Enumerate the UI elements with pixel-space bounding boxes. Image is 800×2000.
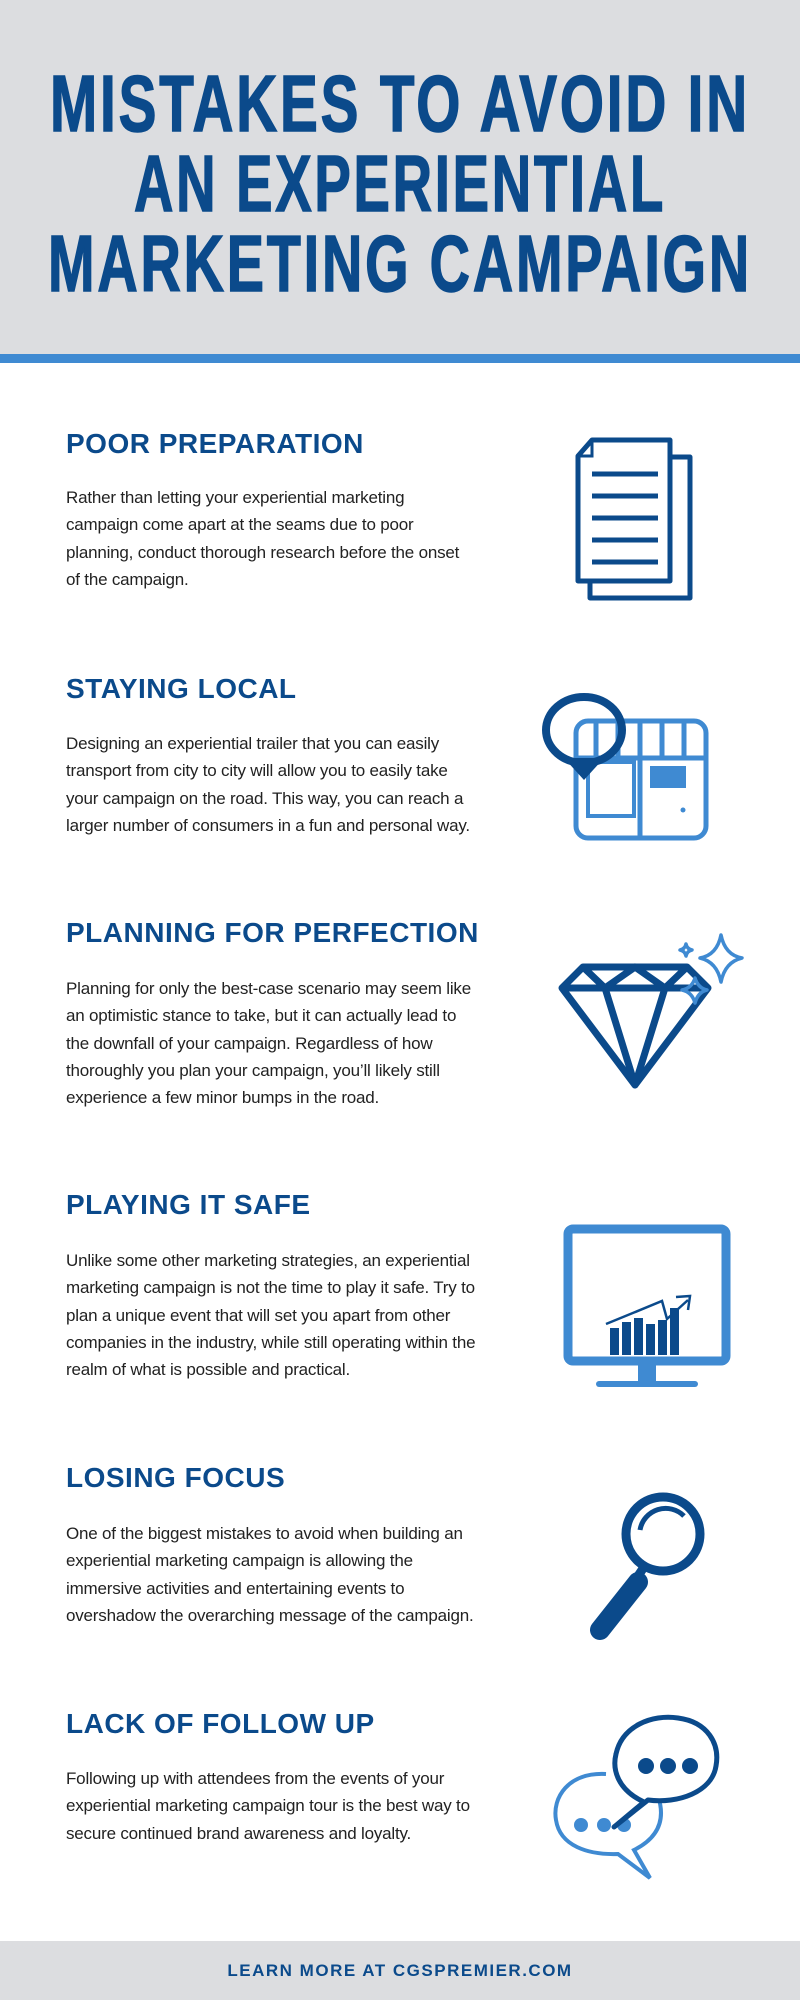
text: poor preparation: Rather than letting your experiential marketing bbox=[66, 488, 404, 507]
text: losing focus: immersive activities and entertaining events to bbox=[66, 1579, 404, 1598]
icon: documents bbox=[576, 438, 692, 600]
heading: lack of follow up: LACK OF FOLLOW UP bbox=[66, 1708, 375, 1739]
text: playing it safe: plan a unique event that will set you apart from other bbox=[66, 1306, 450, 1325]
heading: planning for perfection: PLANNING FOR PERFECTION bbox=[66, 917, 479, 948]
icon: magnifying glass bbox=[590, 1492, 704, 1640]
text: staying local: transport from city to city will allow you to easily take bbox=[66, 761, 448, 780]
text: playing it safe bbox=[66, 1251, 475, 1379]
text: losing focus: overshadow the overarching message of the campaign. bbox=[66, 1606, 474, 1625]
footer bbox=[0, 1941, 800, 2000]
text: lack of follow up: Following up with attendees from the events of your bbox=[66, 1769, 444, 1788]
text: planning for perfection: Planning for only the best-case scenario may seem like bbox=[66, 979, 471, 998]
heading: losing focus: LOSING FOCUS bbox=[66, 1462, 285, 1493]
text: losing focus: One of the biggest mistakes to avoid when building an bbox=[66, 1524, 463, 1543]
text: planning for perfection bbox=[66, 979, 471, 1107]
text: lack of follow up: experiential marketing campaign tour is the best way to bbox=[66, 1796, 470, 1815]
footer text: LEARN MORE AT CGSPREMIER.COM bbox=[227, 1961, 573, 1980]
text: poor preparation: campaign come apart at the seams due to poor bbox=[66, 515, 413, 534]
text: playing it safe: companies in the industry, while still operating within the bbox=[66, 1333, 475, 1352]
text: playing it safe: marketing campaign is not the time to play it safe. Try to bbox=[66, 1278, 475, 1297]
heading: poor preparation: POOR PREPARATION bbox=[66, 428, 364, 459]
text: playing it safe: realm of what is possible and practical. bbox=[66, 1360, 350, 1379]
text: lack of follow up: secure continued brand awareness and loyalty. bbox=[66, 1824, 411, 1843]
text: losing focus bbox=[66, 1524, 474, 1625]
text: staying local: Designing an experiential trailer that you can easily bbox=[66, 734, 439, 753]
text: staying local: larger number of consumers in a fun and personal way. bbox=[66, 816, 470, 835]
heading: playing it safe: PLAYING IT SAFE bbox=[66, 1189, 311, 1220]
header bbox=[0, 0, 800, 363]
text: playing it safe: Unlike some other marketing strategies, an experiential bbox=[66, 1251, 470, 1270]
text: staying local: your campaign on the road. This way, you can reach a bbox=[66, 789, 463, 808]
text: planning for perfection: experience a few minor bumps in the road. bbox=[66, 1088, 379, 1107]
title bbox=[48, 59, 752, 308]
heading: staying local: STAYING LOCAL bbox=[66, 673, 297, 704]
icon: monitor with chart bbox=[564, 1224, 730, 1387]
text: poor preparation bbox=[66, 488, 460, 589]
icon: speech bubbles bbox=[553, 1714, 720, 1880]
text: losing focus: experiential marketing campaign is allowing the bbox=[66, 1551, 413, 1570]
text: poor preparation: planning, conduct thorough research before the onset bbox=[66, 543, 459, 562]
text: poor preparation: of the campaign. bbox=[66, 570, 188, 589]
text: planning for perfection: an optimistic stance to take, but it can actually lead to bbox=[66, 1006, 456, 1025]
icon: diamond with sparkles bbox=[558, 933, 744, 1088]
text: planning for perfection: thoroughly you plan your campaign, you’ll likely still bbox=[66, 1061, 440, 1080]
text: lack of follow up bbox=[66, 1769, 470, 1843]
icon: store with location pin bbox=[542, 693, 708, 840]
text: planning for perfection: the downfall of your campaign. Regardless of how bbox=[66, 1034, 433, 1053]
text: staying local bbox=[66, 734, 470, 835]
